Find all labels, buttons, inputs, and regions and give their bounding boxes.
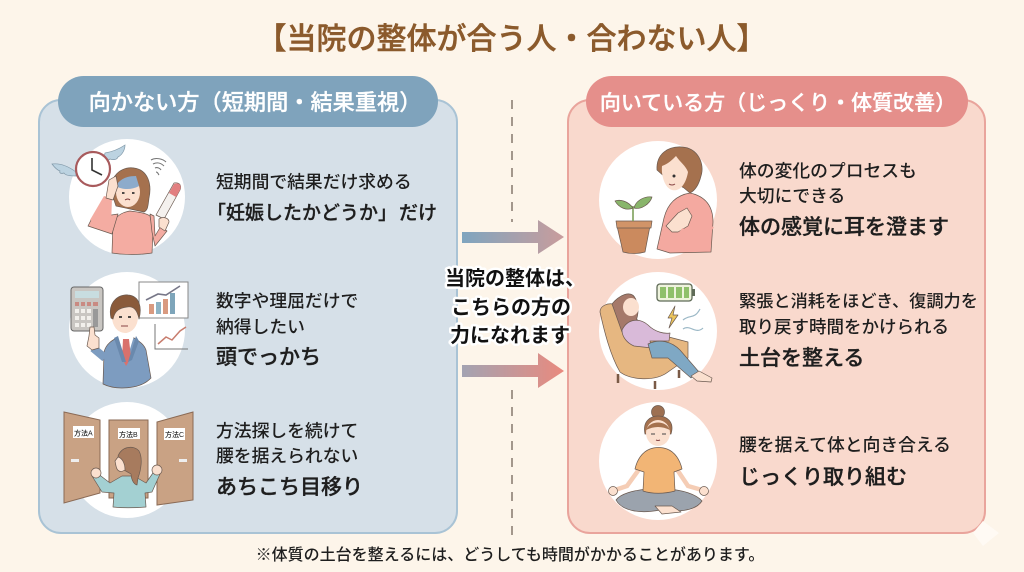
icon: woman resting in armchair <box>600 294 712 389</box>
callout: center message: 力になれます <box>450 324 570 347</box>
footnote: ※体質の土台を整えるには、どうしても時間がかかることがあります。 <box>256 545 764 564</box>
icon: businessman <box>87 295 151 388</box>
text: row 2: 取り戻す時間をかけられる <box>739 317 949 337</box>
icon: charts <box>139 282 188 349</box>
text: row 3: 方法探しを続けて <box>216 421 358 441</box>
icon: battery <box>657 284 695 301</box>
header: suited <box>586 76 968 127</box>
icon: three doors: 方法C <box>165 430 184 439</box>
icon: meditating woman <box>608 406 708 514</box>
text: row 1 <box>739 161 949 239</box>
row 1: short-term results <box>52 139 437 255</box>
text: row 2 <box>216 291 358 369</box>
callout: center message: 当院の整体は、 <box>445 267 585 290</box>
arrow: lower <box>462 353 564 388</box>
icon: woman hands on chest <box>657 147 713 253</box>
text: row 1: だけ <box>399 203 437 224</box>
callout: center message <box>445 267 585 347</box>
text: row 2 <box>739 291 978 370</box>
text: row 2: 納得したい <box>216 317 305 337</box>
text: row 2: 緊張と消耗をほどき、復調力を <box>739 291 978 311</box>
text: row 2: 頭でっかち <box>216 346 321 369</box>
header: not suited <box>58 76 438 127</box>
text: row 3: 腰を据えて体と向き合える <box>739 435 951 455</box>
icon: calculator <box>71 287 103 331</box>
text: row 2: 数字や理屈だけで <box>216 291 358 311</box>
text: row 3: 腰を据えられない <box>216 446 358 466</box>
text: row 1: 「妊娠したかどうか」 <box>207 203 397 224</box>
icon: winged clock <box>52 145 125 186</box>
text: row 1: 体の感覚に耳を澄ます <box>739 215 949 239</box>
text: row 2: 土台を整える <box>739 347 864 370</box>
icon: woman from behind <box>91 447 162 508</box>
icon: three doors <box>64 412 193 505</box>
callout: center message: こちらの方の <box>451 296 571 319</box>
icon: worried woman <box>88 168 181 254</box>
text: row 1: 大切にできる <box>739 186 845 206</box>
text: row 3 <box>216 421 363 499</box>
row 1: listening to the body <box>599 141 949 259</box>
icon: potted sprout <box>615 197 652 254</box>
icon: three doors: 方法B <box>119 430 138 439</box>
panel: not suited <box>39 76 457 533</box>
row 2: numbers and logic <box>69 272 358 388</box>
arrow: upper <box>462 220 564 254</box>
icon: lightning and breeze <box>668 306 703 330</box>
row 3: jumping between methods <box>64 402 363 518</box>
header: not suited: 向かない方（短期間・結果重視） <box>89 90 421 115</box>
text: row 3 <box>739 435 951 489</box>
icon: three doors: 方法A <box>74 428 93 438</box>
header: suited: 向いている方（じっくり・体質改善） <box>600 92 956 115</box>
text: row 1: 体の変化のプロセスも <box>739 161 917 181</box>
row 3: taking time <box>599 402 951 520</box>
text: row 1 <box>207 172 437 224</box>
icon: whirl <box>151 159 166 175</box>
panel: suited <box>568 76 985 533</box>
title: 【当院の整体が合う人・合わない人】 <box>256 23 766 56</box>
text: row 3: あちこち目移り <box>216 476 363 499</box>
text: row 1: 短期間で結果だけ求める <box>216 172 412 192</box>
row 2: rebuild the foundation <box>599 272 978 390</box>
text: row 3: じっくり取り組む <box>739 466 907 489</box>
